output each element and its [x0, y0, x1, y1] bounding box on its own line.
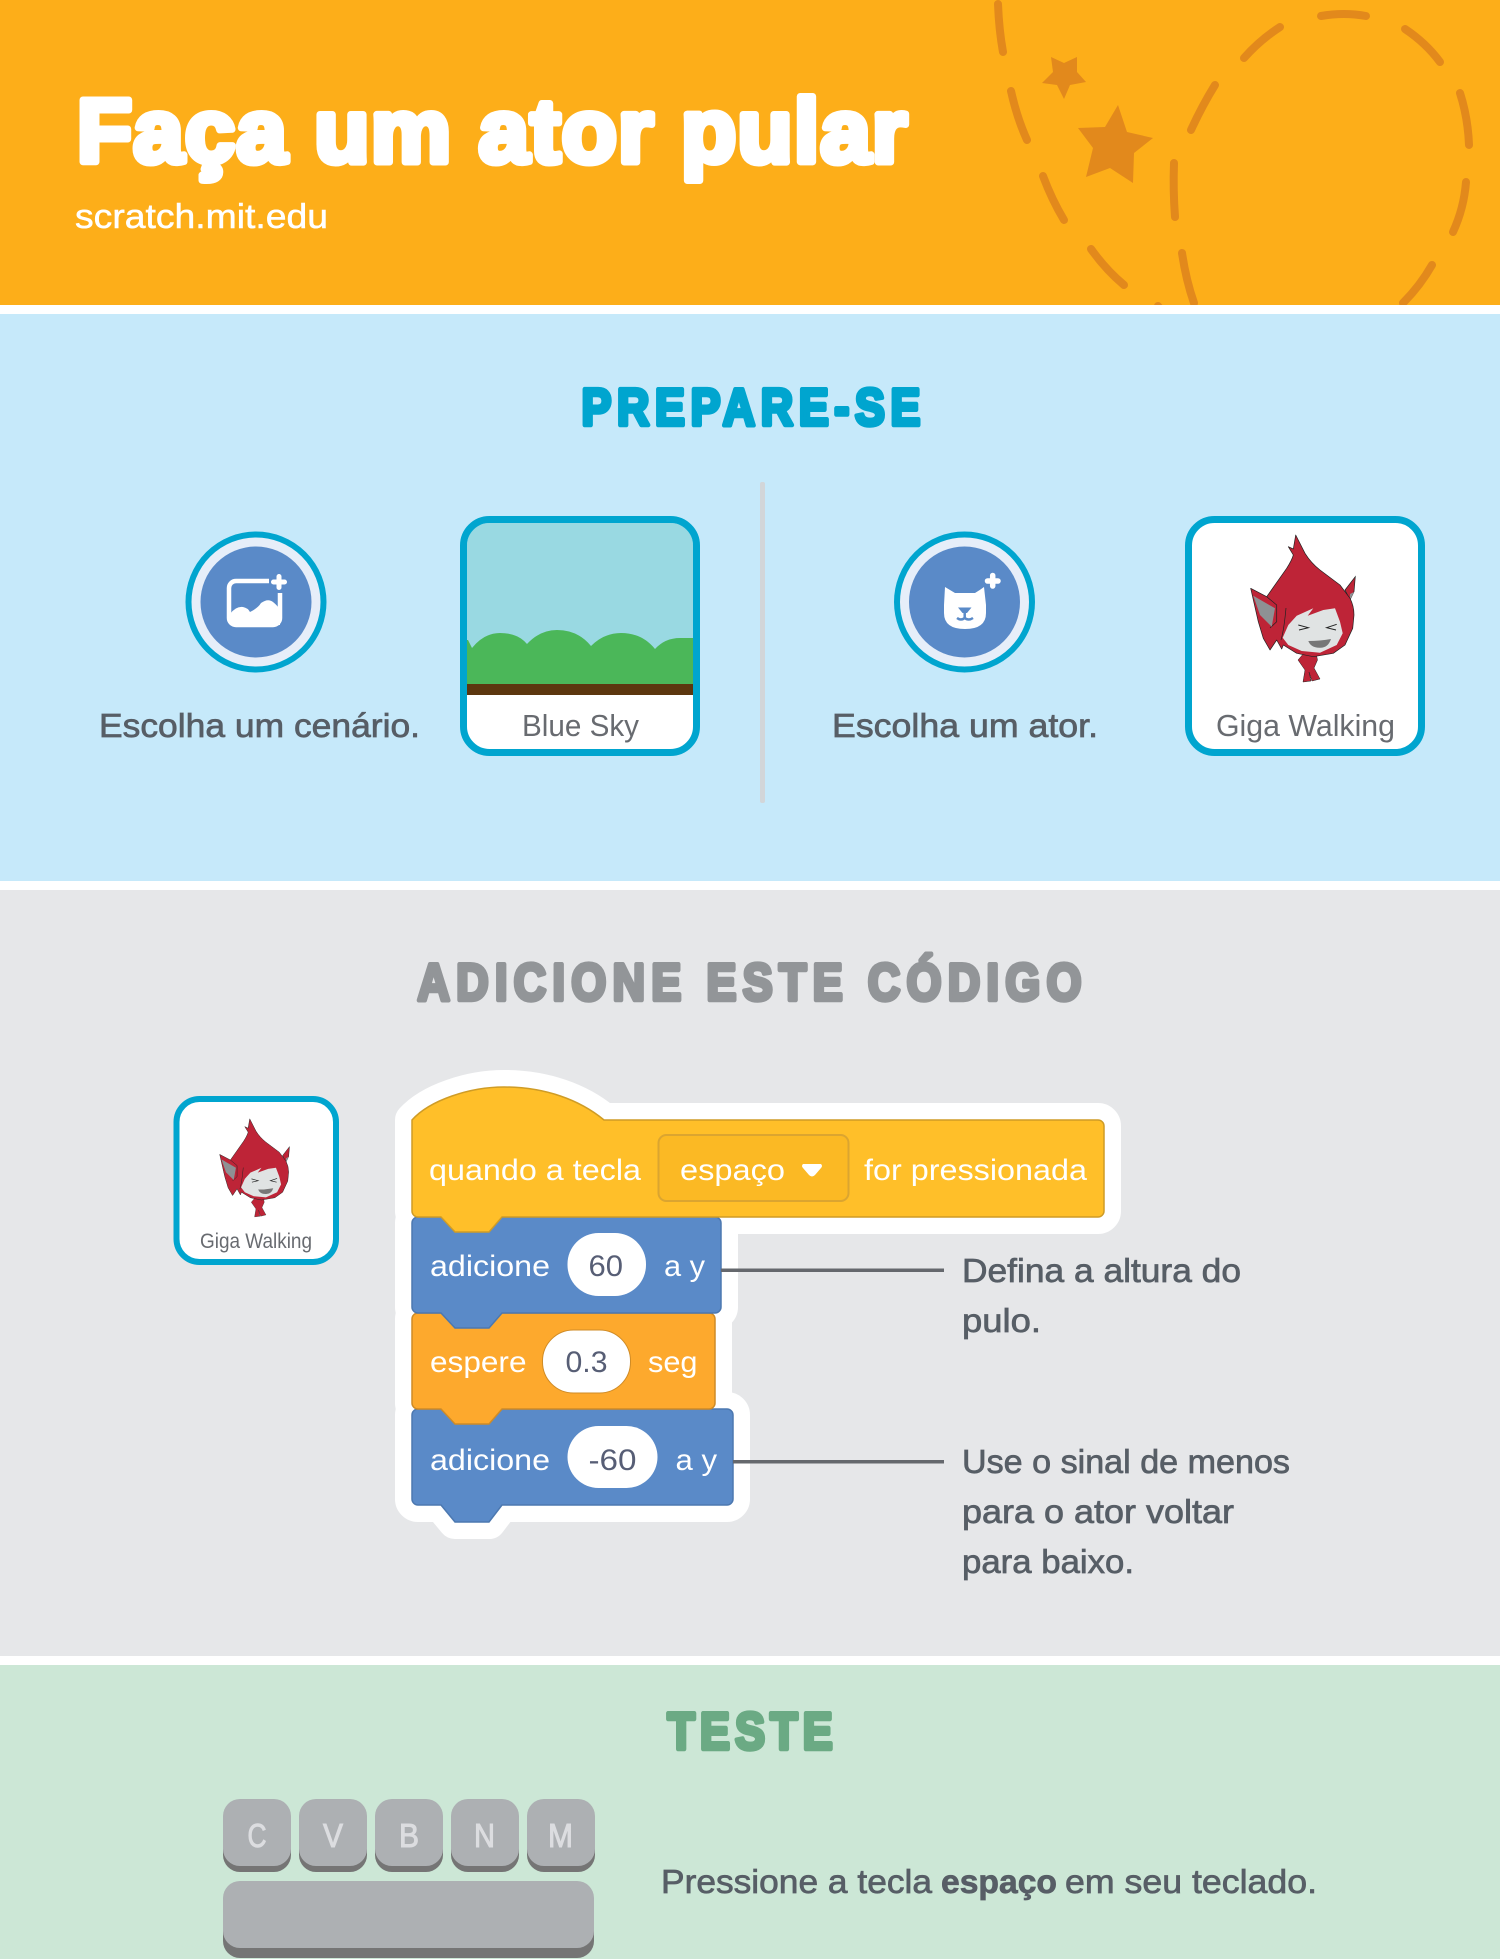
dashed jump trajectory decoration	[998, 4, 1469, 312]
instruction text: Pressione a tecla	[661, 1863, 933, 1900]
code blocks white outline	[412, 1087, 1104, 1522]
callout: jump height	[962, 1252, 1241, 1339]
callout: minus sign: para o ator voltar	[962, 1493, 1234, 1530]
label: Giga Walking: Giga Walking	[1216, 708, 1395, 743]
website: scratch.mit.edu	[75, 198, 328, 236]
callout: jump height: pulo.	[962, 1302, 1041, 1339]
panel: test	[0, 1665, 1500, 1959]
block: espere 0.3 seg	[412, 1313, 715, 1424]
heading: code: ADICIONE ESTE CÓDIGO	[418, 953, 1081, 1012]
small sprite card	[176, 1099, 336, 1262]
block: adicione -60 a y: a y	[676, 1444, 717, 1477]
text: choose backdrop: Escolha um cenário.	[99, 707, 420, 744]
sprite: Giga small	[220, 1119, 289, 1217]
leader line: jump height	[721, 1268, 944, 1272]
block: espere 0.3 seg: seg	[648, 1346, 698, 1379]
icon: large star	[1078, 105, 1153, 183]
leader line: minus sign	[733, 1460, 944, 1464]
callout: minus sign: Use o sinal de menos	[962, 1443, 1290, 1480]
backdrop card: Blue Sky	[460, 515, 700, 752]
callout: jump height: Defina a altura do	[962, 1252, 1241, 1289]
instruction text	[661, 1863, 1317, 1900]
title: Faça um ator pular	[77, 82, 907, 182]
block: quando a tecla espaco for pressionada: quando a tecla	[429, 1154, 641, 1187]
block: quando a tecla espaco for pressionada: espaço	[680, 1154, 785, 1187]
header band	[0, 0, 1500, 312]
label: Giga Walking small: Giga Walking	[200, 1230, 312, 1253]
block: adicione 60 a y: a y	[664, 1250, 705, 1283]
block: adicione 60 a y	[412, 1217, 721, 1328]
heading: prepare: PREPARE-SE	[582, 379, 920, 437]
keyboard illustration: B	[399, 1817, 419, 1854]
block: adicione -60 a y	[412, 1409, 733, 1522]
icon: choose sprite button	[897, 534, 1032, 670]
block: adicione -60 a y: adicione	[430, 1444, 550, 1477]
block: espere 0.3 seg: 0.3	[566, 1346, 608, 1379]
keyboard illustration: V	[323, 1817, 343, 1854]
instruction text: em seu teclado.	[1065, 1863, 1317, 1900]
keyboard illustration: C	[248, 1817, 266, 1854]
keyboard illustration	[223, 1799, 595, 1958]
block: espere 0.3 seg: espere	[430, 1346, 526, 1379]
panel: code	[0, 890, 1500, 1656]
divider	[760, 482, 765, 803]
instruction text: espaço	[941, 1863, 1057, 1900]
heading: test: TESTE	[668, 1703, 833, 1761]
block: adicione -60 a y: -60	[588, 1444, 636, 1477]
icon: small star	[1042, 57, 1086, 99]
callout: minus sign: para baixo.	[962, 1543, 1134, 1580]
block: adicione 60 a y: adicione	[430, 1250, 550, 1283]
keyboard illustration: M	[548, 1817, 573, 1854]
text: choose sprite: Escolha um ator.	[832, 707, 1098, 744]
sprite card: Giga Walking	[1188, 520, 1422, 752]
sprite: Giga	[1251, 535, 1355, 682]
callout: minus sign	[962, 1443, 1290, 1580]
label: Blue Sky: Blue Sky	[522, 708, 639, 743]
block: quando a tecla espaco for pressionada	[412, 1087, 1104, 1232]
block: adicione 60 a y: 60	[588, 1250, 623, 1283]
block: quando a tecla espaco for pressionada: for pressionada	[864, 1154, 1087, 1187]
icon: choose backdrop button	[188, 534, 324, 670]
keyboard illustration: N	[474, 1817, 495, 1854]
panel: prepare	[0, 314, 1500, 881]
